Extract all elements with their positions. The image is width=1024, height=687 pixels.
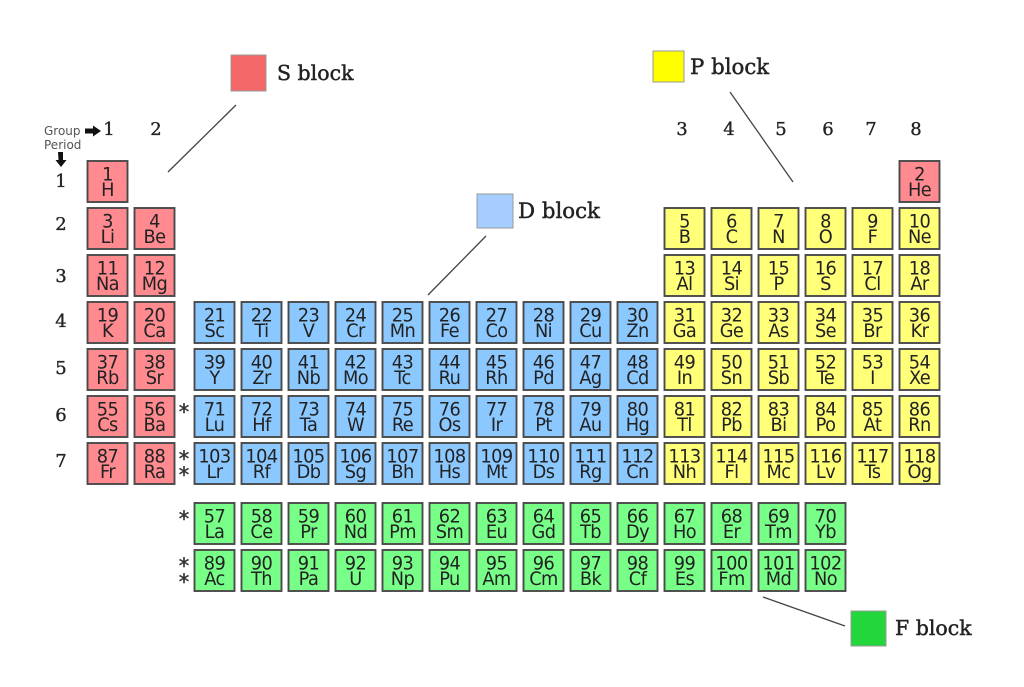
lanthanide and actinide asterisks: * <box>179 447 189 471</box>
panel: P block elements: 81 <box>674 399 695 421</box>
panel: P block elements: Se <box>815 321 836 342</box>
leader line: P block <box>730 92 793 182</box>
lanthanide and actinide asterisks <box>179 400 189 594</box>
panel: P block elements: Po <box>816 415 836 436</box>
panel: D block elements: 79 <box>580 399 601 421</box>
panel: F block elements: 101 <box>762 553 795 575</box>
panel: D block elements: 30 <box>627 305 648 327</box>
panel: P block elements: 114 <box>715 446 748 468</box>
panel: S block elements: 1 <box>102 164 113 186</box>
panel: F block elements: 102 <box>809 553 842 575</box>
panel: S block elements: 20 <box>144 305 165 327</box>
panel: P block elements: Ts <box>863 462 881 483</box>
panel: F block elements: La <box>205 522 224 543</box>
panel: P block elements: 14 <box>721 258 742 280</box>
panel: D block elements: Co <box>485 321 508 342</box>
panel: S block elements: 87 <box>97 446 118 468</box>
panel: P block elements: 52 <box>815 352 836 374</box>
panel: S block elements: Be <box>144 227 166 248</box>
panel: S block elements: Ra <box>144 462 165 483</box>
panel: F block elements: 95 <box>486 553 507 575</box>
panel: F block elements: 61 <box>392 506 413 528</box>
panel: D block elements: Rh <box>485 368 508 389</box>
panel: F block elements: Eu <box>486 522 507 543</box>
panel: P block elements: Ar <box>910 274 930 295</box>
panel: D block elements: Mt <box>486 462 508 483</box>
lanthanide and actinide asterisks: * <box>179 554 189 578</box>
panel: D block elements: Tc <box>393 368 411 389</box>
panel: P block elements: 51 <box>768 352 789 374</box>
panel: S block elements <box>88 161 940 484</box>
panel: P block elements: 6 <box>726 211 737 233</box>
panel: P block elements: 50 <box>721 352 742 374</box>
panel: D block elements: 22 <box>251 305 272 327</box>
legend: F block: F block <box>895 616 972 640</box>
panel: P block elements: 116 <box>809 446 842 468</box>
panel: F block elements: Pm <box>389 522 416 543</box>
panel: P block elements: 9 <box>867 211 878 233</box>
panel: D block elements: Rg <box>579 462 602 483</box>
panel: F block elements: 93 <box>392 553 413 575</box>
panel: F block elements: Es <box>675 569 694 590</box>
panel: F block elements: No <box>814 569 837 590</box>
panel: D block elements: Mn <box>390 321 415 342</box>
panel: D block elements: Au <box>579 415 602 436</box>
panel: P block elements: Og <box>907 462 932 483</box>
panel: F block elements: Tm <box>764 522 792 543</box>
panel: P block elements: F <box>868 227 877 248</box>
panel: P block elements: 117 <box>856 446 889 468</box>
panel: P block elements: C <box>726 227 737 248</box>
panel: P block elements: 83 <box>768 399 789 421</box>
panel: P block elements <box>664 208 940 484</box>
panel: D block elements: 48 <box>627 352 648 374</box>
panel: F block elements: 67 <box>674 506 695 528</box>
panel: D block elements: Cn <box>626 462 649 483</box>
group numbers: 8 <box>910 119 922 140</box>
panel: P block elements: 115 <box>762 446 795 468</box>
panel: P block elements: Te <box>816 368 835 389</box>
panel: P block elements: Xe <box>909 368 931 389</box>
panel: P block elements: Tl <box>676 415 692 436</box>
panel: F block elements: Am <box>482 569 511 590</box>
panel: D block elements: 29 <box>580 305 601 327</box>
legend: F block <box>851 611 972 646</box>
panel: D block elements: Hg <box>626 415 649 436</box>
panel: P block elements: Sn <box>721 368 742 389</box>
period axis label <box>44 138 81 167</box>
panel: F block elements: 91 <box>298 553 319 575</box>
panel: F block elements: 58 <box>251 506 272 528</box>
panel: F block elements: Yb <box>814 522 836 543</box>
panel: S block elements: Cs <box>97 415 118 436</box>
panel: D block elements: 105 <box>292 446 325 468</box>
panel: F block elements: Th <box>250 569 272 590</box>
panel: D block elements: Ir <box>491 415 503 436</box>
panel: P block elements: In <box>677 368 692 389</box>
period numbers: 5 <box>55 358 67 379</box>
panel: S block elements: 55 <box>97 399 118 421</box>
panel: D block elements: 74 <box>345 399 366 421</box>
panel: P block elements: Rn <box>908 415 931 436</box>
panel: F block elements: Ac <box>204 569 225 590</box>
panel: P block elements: 85 <box>862 399 883 421</box>
panel: F block elements: Er <box>723 522 741 543</box>
panel: P block elements: 35 <box>862 305 883 327</box>
panel: S block elements: Li <box>101 227 114 248</box>
panel: D block elements: 27 <box>486 305 507 327</box>
panel: F block elements: Cf <box>629 569 647 590</box>
panel: F block elements: 69 <box>768 506 789 528</box>
group numbers: 6 <box>822 119 834 140</box>
panel: D block elements: 44 <box>439 352 460 374</box>
panel: F block elements: 66 <box>627 506 648 528</box>
panel: D block elements: V <box>303 321 315 342</box>
panel: S block elements: Sr <box>146 368 164 389</box>
panel: D block elements: Cu <box>579 321 602 342</box>
group numbers: 3 <box>676 119 688 140</box>
panel: D block elements: 23 <box>298 305 319 327</box>
panel: D block elements: 71 <box>204 399 225 421</box>
panel: P block elements: Fl <box>724 462 739 483</box>
panel: S block elements: K <box>102 321 115 342</box>
period numbers: 2 <box>55 214 67 235</box>
panel: P block elements: 34 <box>815 305 836 327</box>
panel: P block elements: Kr <box>911 321 930 342</box>
panel: P block elements: As <box>768 321 789 342</box>
panel: D block elements: Hs <box>439 462 460 483</box>
panel: D block elements: Sc <box>205 321 224 342</box>
panel: D block elements: 47 <box>580 352 601 374</box>
panel: D block elements: Db <box>297 462 320 483</box>
panel: P block elements: 32 <box>721 305 742 327</box>
panel: D block elements: Cr <box>346 321 366 342</box>
legend: S block: S block <box>277 61 354 85</box>
panel: D block elements: Ds <box>533 462 555 483</box>
panel: F block elements: 98 <box>627 553 648 575</box>
panel: F block elements: 94 <box>439 553 460 575</box>
panel: D block elements: 78 <box>533 399 554 421</box>
panel: F block elements: Dy <box>626 522 650 543</box>
panel: D block elements: 80 <box>627 399 648 421</box>
panel: D block elements: Ni <box>535 321 552 342</box>
panel: D block elements: Ti <box>253 321 269 342</box>
leader line: S block <box>168 105 236 172</box>
panel: S block elements: He <box>908 180 931 201</box>
lanthanide and actinide asterisks: * <box>179 400 189 424</box>
panel: D block elements: Zr <box>252 368 272 389</box>
panel: P block elements: 10 <box>909 211 930 233</box>
panel: F block elements: 99 <box>674 553 695 575</box>
panel: S block elements: 2 <box>914 164 925 186</box>
panel: D block elements: 107 <box>386 446 419 468</box>
panel: F block elements: 60 <box>345 506 366 528</box>
panel: S block elements: 12 <box>144 258 165 280</box>
panel: D block elements: Ta <box>299 415 317 436</box>
panel: D block elements: 46 <box>533 352 554 374</box>
panel: D block elements: 109 <box>480 446 513 468</box>
panel: D block elements: Rf <box>253 462 271 483</box>
panel: P block elements: 16 <box>815 258 836 280</box>
panel: F block elements: 57 <box>204 506 225 528</box>
panel: S block elements: 11 <box>97 258 118 280</box>
panel: D block elements: Ag <box>579 368 602 389</box>
panel: D block elements: 76 <box>439 399 460 421</box>
panel: D block elements: Mo <box>343 368 369 389</box>
panel: P block elements: O <box>819 227 833 248</box>
panel: F block elements: 63 <box>486 506 507 528</box>
panel: S block elements: 88 <box>144 446 165 468</box>
panel: F block elements: Tb <box>579 522 601 543</box>
panel: D block elements: Os <box>438 415 461 436</box>
panel: F block elements: 96 <box>533 553 554 575</box>
panel: D block elements: 25 <box>392 305 413 327</box>
panel: S block elements: 19 <box>97 305 118 327</box>
panel: F block elements: 97 <box>580 553 601 575</box>
panel: P block elements: Lv <box>816 462 836 483</box>
panel: D block elements: Lu <box>205 415 224 436</box>
legend: P block: P block <box>690 55 770 80</box>
panel: F block elements: Pu <box>439 569 460 590</box>
panel: F block elements: Bk <box>580 569 602 590</box>
group numbers: 5 <box>775 119 787 140</box>
panel: F block elements: 92 <box>345 553 366 575</box>
lanthanide and actinide asterisks: * <box>179 507 189 531</box>
panel: D block elements: 110 <box>527 446 560 468</box>
panel: F block elements: 90 <box>251 553 272 575</box>
panel: S block elements: Rb <box>96 368 119 389</box>
panel: D block elements: W <box>347 415 365 436</box>
panel: D block elements: 104 <box>245 446 278 468</box>
legend: S block <box>231 55 354 91</box>
panel: P block elements: Mc <box>767 462 790 483</box>
lanthanide and actinide asterisks: * <box>179 463 189 487</box>
panel: D block elements: 21 <box>204 305 225 327</box>
legend: P block <box>653 51 770 82</box>
panel: D block elements: 28 <box>533 305 554 327</box>
panel: D block elements: 112 <box>621 446 654 468</box>
panel: S block elements: 3 <box>102 211 113 233</box>
panel: D block elements: Bh <box>391 462 414 483</box>
period numbers: 6 <box>55 405 67 426</box>
panel: S block elements: Na <box>96 274 119 295</box>
panel: D block elements <box>194 302 658 484</box>
panel: S block elements: Fr <box>100 462 116 483</box>
panel: D block elements: 106 <box>339 446 372 468</box>
legend: D block <box>477 194 601 228</box>
period numbers: 4 <box>55 311 67 332</box>
panel: D block elements: 73 <box>298 399 319 421</box>
panel: P block elements: 113 <box>668 446 701 468</box>
panel: D block elements: 26 <box>439 305 460 327</box>
panel: F block elements: Md <box>766 569 791 590</box>
panel: F block elements: Gd <box>532 522 555 543</box>
group axis label: Group <box>44 124 81 138</box>
group numbers: 2 <box>150 119 162 140</box>
panel: F block elements: 62 <box>439 506 460 528</box>
panel: S block elements: H <box>101 180 114 201</box>
panel: F block elements: 59 <box>298 506 319 528</box>
panel: D block elements: 111 <box>574 446 607 468</box>
panel: D block elements: 75 <box>392 399 413 421</box>
group numbers: 7 <box>865 119 877 140</box>
panel: F block elements: 70 <box>815 506 836 528</box>
panel: P block elements: Pb <box>721 415 742 436</box>
panel: D block elements: 42 <box>345 352 366 374</box>
panel: F block elements: Pa <box>299 569 318 590</box>
group numbers: 4 <box>723 119 735 140</box>
period axis label: Period <box>44 138 81 152</box>
panel: D block elements: 43 <box>392 352 413 374</box>
panel: P block elements: B <box>679 227 690 248</box>
panel: D block elements: 39 <box>204 352 225 374</box>
panel: P block elements: P <box>773 274 784 295</box>
panel: F block elements: Np <box>391 569 414 590</box>
panel: P block elements: 18 <box>909 258 930 280</box>
panel: D block elements: Hf <box>252 415 272 436</box>
leader line: F block <box>763 597 845 626</box>
panel: P block elements: Cl <box>864 274 881 295</box>
panel: D block elements: 24 <box>345 305 366 327</box>
panel: P block elements: 17 <box>862 258 883 280</box>
panel: P block elements: Ne <box>908 227 931 248</box>
panel: P block elements: 7 <box>773 211 784 233</box>
panel: P block elements: At <box>864 415 882 436</box>
period numbers <box>55 171 67 472</box>
group numbers: 1 <box>103 119 115 140</box>
panel: P block elements: 53 <box>862 352 883 374</box>
panel: D block elements: Ru <box>439 368 460 389</box>
panel: D block elements: 77 <box>486 399 507 421</box>
leader line: D block <box>428 236 486 295</box>
panel: P block elements: 82 <box>721 399 742 421</box>
panel: D block elements: Pd <box>533 368 554 389</box>
panel: F block elements: Sm <box>436 522 463 543</box>
panel: D block elements: Fe <box>440 321 459 342</box>
lanthanide and actinide asterisks: * <box>179 570 189 594</box>
panel: P block elements: 54 <box>909 352 930 374</box>
panel: P block elements: 15 <box>768 258 789 280</box>
panel: S block elements: 38 <box>144 352 165 374</box>
panel: P block elements: Nh <box>673 462 696 483</box>
panel: F block elements: U <box>349 569 362 590</box>
panel: F block elements: 89 <box>204 553 225 575</box>
panel: F block elements: 100 <box>715 553 748 575</box>
panel: F block elements: Fm <box>718 569 745 590</box>
panel: S block elements: 56 <box>144 399 165 421</box>
panel: D block elements: 41 <box>298 352 319 374</box>
panel: F block elements: Cm <box>529 569 558 590</box>
panel: P block elements: Ga <box>673 321 696 342</box>
panel: P block elements: Si <box>724 274 739 295</box>
panel: D block elements: Zn <box>626 321 649 342</box>
panel: P block elements: 49 <box>674 352 695 374</box>
panel: D block elements: Cd <box>626 368 649 389</box>
panel: S block elements: Mg <box>142 274 167 295</box>
panel: D block elements: Pt <box>535 415 552 436</box>
panel: F block elements: Pr <box>300 522 318 543</box>
panel: S block elements: 4 <box>149 211 160 233</box>
group numbers <box>103 119 922 140</box>
panel: D block elements: Sg <box>345 462 366 483</box>
panel: D block elements: 45 <box>486 352 507 374</box>
panel: P block elements: Ge <box>720 321 744 342</box>
panel: D block elements: 103 <box>198 446 231 468</box>
panel: P block elements: 13 <box>674 258 695 280</box>
panel: P block elements: 5 <box>679 211 690 233</box>
panel: F block elements: 64 <box>533 506 554 528</box>
panel: P block elements: 33 <box>768 305 789 327</box>
panel: P block elements: 36 <box>909 305 930 327</box>
group axis label <box>44 124 101 138</box>
panel: F block elements: Nd <box>344 522 367 543</box>
panel: P block elements: I <box>870 368 875 389</box>
panel: P block elements: 8 <box>820 211 831 233</box>
panel: P block elements: 84 <box>815 399 836 421</box>
panel: P block elements: Bi <box>771 415 786 436</box>
panel: D block elements: Re <box>392 415 414 436</box>
panel: P block elements: N <box>772 227 785 248</box>
panel: D block elements: 108 <box>433 446 466 468</box>
period numbers: 3 <box>55 266 67 287</box>
panel: S block elements: Ba <box>144 415 165 436</box>
panel: D block elements: Lr <box>207 462 224 483</box>
panel: D block elements: 40 <box>251 352 272 374</box>
panel: P block elements: Sb <box>768 368 789 389</box>
period numbers: 7 <box>55 451 67 472</box>
panel: F block elements: Ce <box>250 522 273 543</box>
panel: D block elements: Nb <box>297 368 320 389</box>
panel: S block elements: 37 <box>97 352 118 374</box>
panel: F block elements <box>194 503 846 591</box>
panel: S block elements: Ca <box>143 321 166 342</box>
panel: P block elements: 31 <box>674 305 695 327</box>
panel: P block elements: S <box>820 274 831 295</box>
panel: P block elements: Al <box>677 274 692 295</box>
panel: F block elements: 65 <box>580 506 601 528</box>
panel: P block elements: 118 <box>903 446 936 468</box>
panel: P block elements: Br <box>863 321 883 342</box>
legend: D block: D block <box>518 199 601 224</box>
panel: F block elements: Ho <box>673 522 697 543</box>
period numbers: 1 <box>55 171 67 192</box>
panel: P block elements: 86 <box>909 399 930 421</box>
panel: F block elements: 68 <box>721 506 742 528</box>
panel: D block elements: 72 <box>251 399 272 421</box>
panel: D block elements: Y <box>208 368 221 389</box>
